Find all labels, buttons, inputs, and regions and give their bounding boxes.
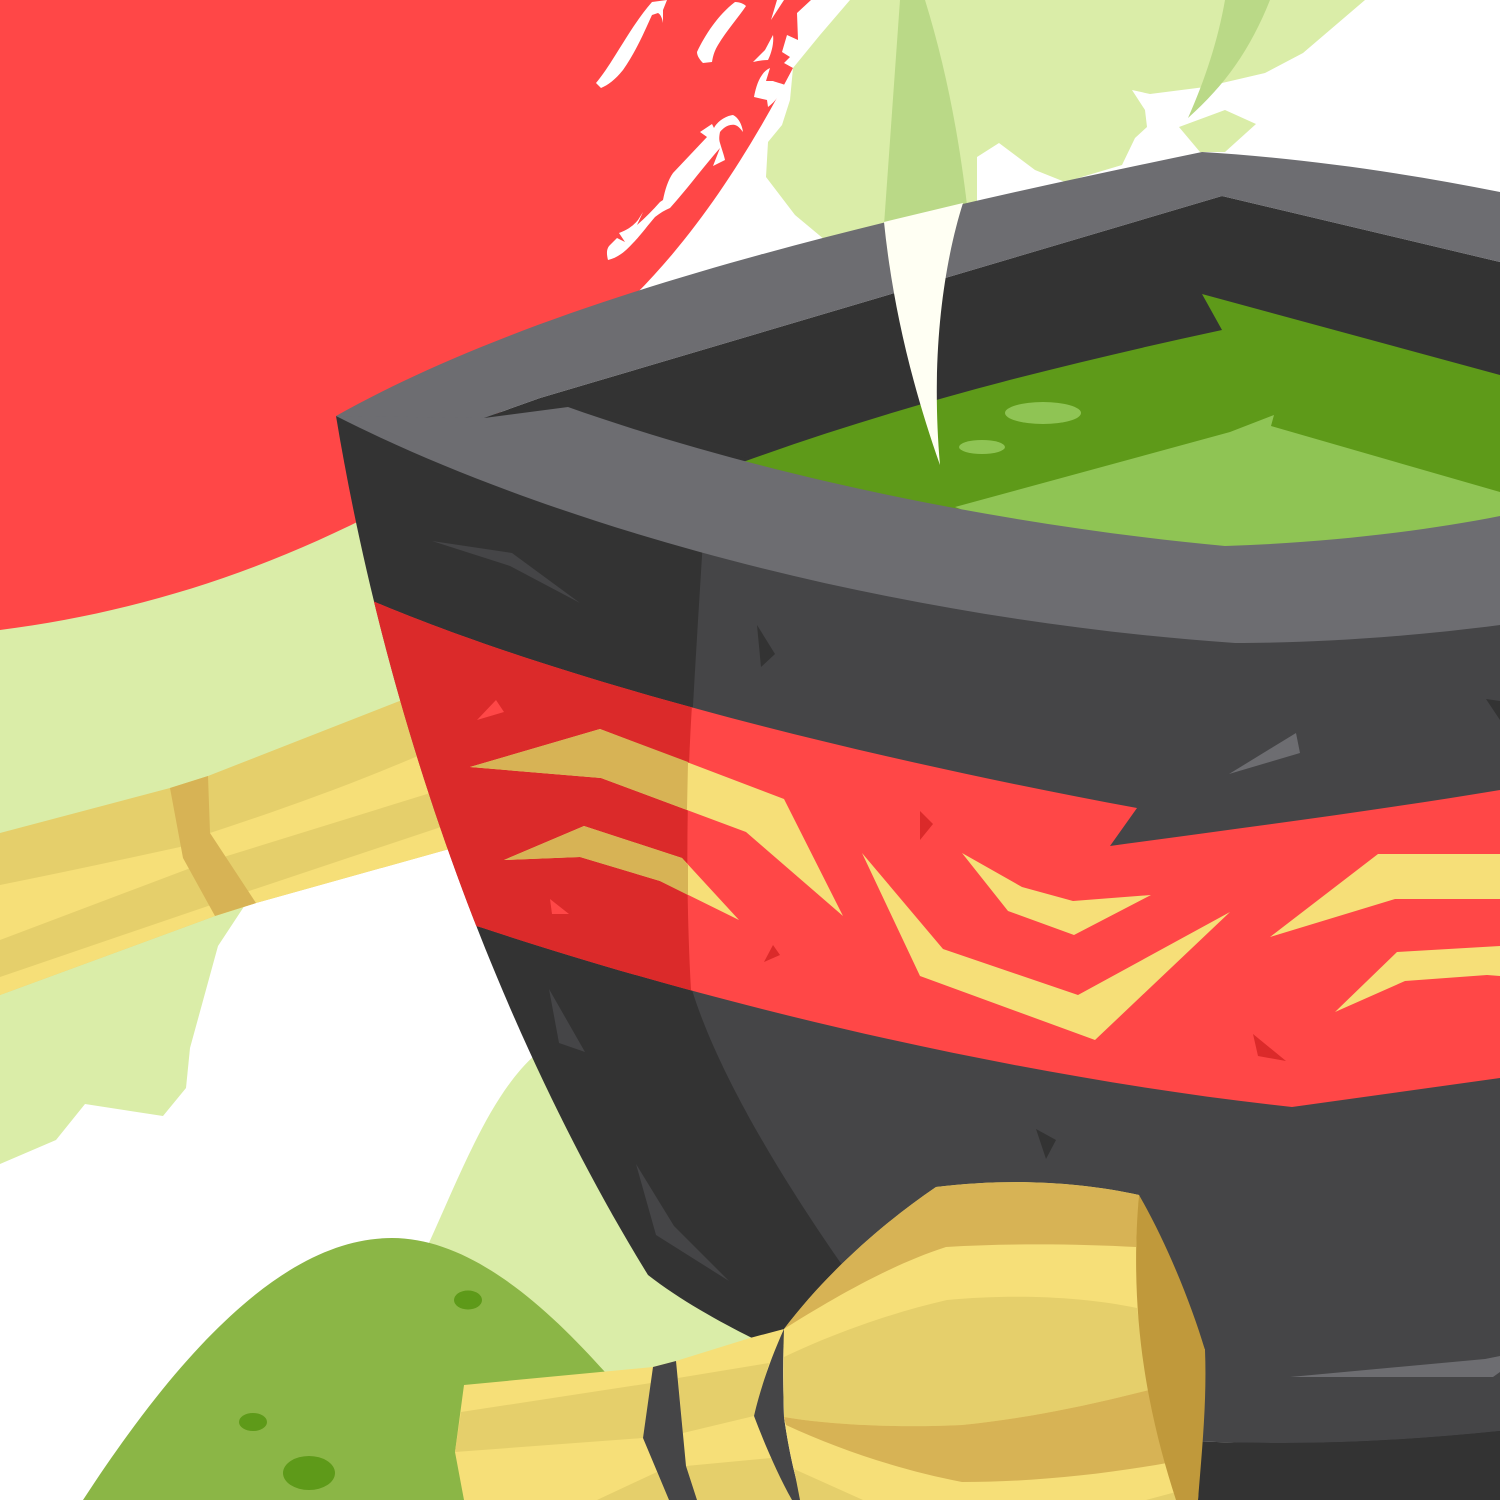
background: darker green steam shapes [884, 0, 1270, 225]
bowl body lit side [687, 500, 1500, 1443]
left whisk handle [0, 693, 460, 995]
handle bindings [643, 1329, 802, 1500]
bowl rim back [336, 152, 1500, 426]
band zigzag pattern [470, 729, 1500, 1040]
whisk handle [455, 1329, 792, 1500]
tea bubbles [959, 402, 1081, 454]
red band shadow [374, 602, 692, 990]
mound speckles [239, 1290, 482, 1490]
whisk head [783, 1182, 1205, 1500]
matcha tea surface [743, 294, 1500, 560]
front whisk [455, 1182, 1205, 1500]
white brush strokes on sun [596, 0, 785, 260]
head tips [794, 1469, 1178, 1500]
head top band [784, 1182, 1139, 1329]
bowl body shadow side [336, 400, 1500, 1500]
zigzag shaded part [470, 729, 688, 895]
bowl [336, 152, 1500, 1500]
red sun [0, 0, 811, 630]
head side [1136, 1195, 1205, 1500]
bowl inner wall [484, 196, 1500, 560]
whisk binding [170, 776, 256, 916]
tea highlight [955, 415, 1500, 560]
red band [340, 590, 1500, 1107]
white steam wisp [884, 203, 963, 465]
head middle [784, 1297, 1149, 1426]
matcha powder mound [83, 1238, 605, 1500]
head lower band [784, 1390, 1167, 1482]
handle strands [455, 1363, 792, 1500]
bowl foot shadow [1000, 1430, 1500, 1500]
bowl rim front [336, 407, 1500, 643]
bowl chips and speckles [432, 541, 1500, 1377]
